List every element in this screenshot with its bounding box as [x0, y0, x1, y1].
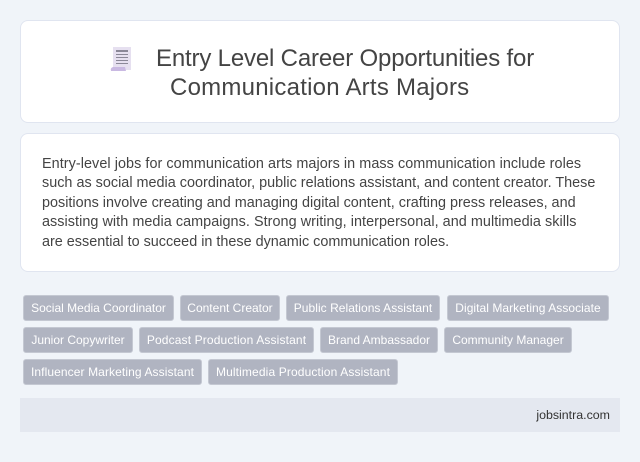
- tags: Social Media Coordinator: [31, 301, 166, 315]
- tags: Community Manager: [452, 333, 564, 347]
- title: [156, 45, 534, 101]
- description text: assisting with media campaigns. Strong writing, interpersonal, and multimedia skills: [42, 214, 576, 230]
- tags: Content Creator: [187, 301, 273, 315]
- description text: are essential to succeed in these dynamic communication roles.: [42, 234, 449, 250]
- description text: positions involve creating and managing digital content, crafting press releases, and: [42, 195, 576, 211]
- tags: Influencer Marketing Assistant: [31, 365, 194, 379]
- tags: Podcast Production Assistant: [147, 333, 306, 347]
- description text: Entry-level jobs for communication arts majors in mass communication include roles: [42, 156, 581, 172]
- tags: Brand Ambassador: [328, 333, 430, 347]
- description text: such as social media coordinator, public relations assistant, and content creator. These: [42, 175, 595, 191]
- title: Entry Level Career Opportunities for: [156, 45, 534, 72]
- title: Communication Arts Majors: [170, 74, 469, 101]
- icon: document scroll: [110, 47, 131, 71]
- tags: [23, 295, 609, 385]
- tags: Junior Copywriter: [31, 333, 125, 347]
- title card: [20, 20, 620, 123]
- description text: [42, 156, 595, 250]
- footer bar: [20, 398, 620, 432]
- description card: [20, 133, 620, 272]
- tags: Multimedia Production Assistant: [216, 365, 390, 379]
- footer source text: jobsintra.com: [536, 408, 610, 422]
- tags: Digital Marketing Associate: [455, 301, 601, 315]
- tags: Public Relations Assistant: [294, 301, 432, 315]
